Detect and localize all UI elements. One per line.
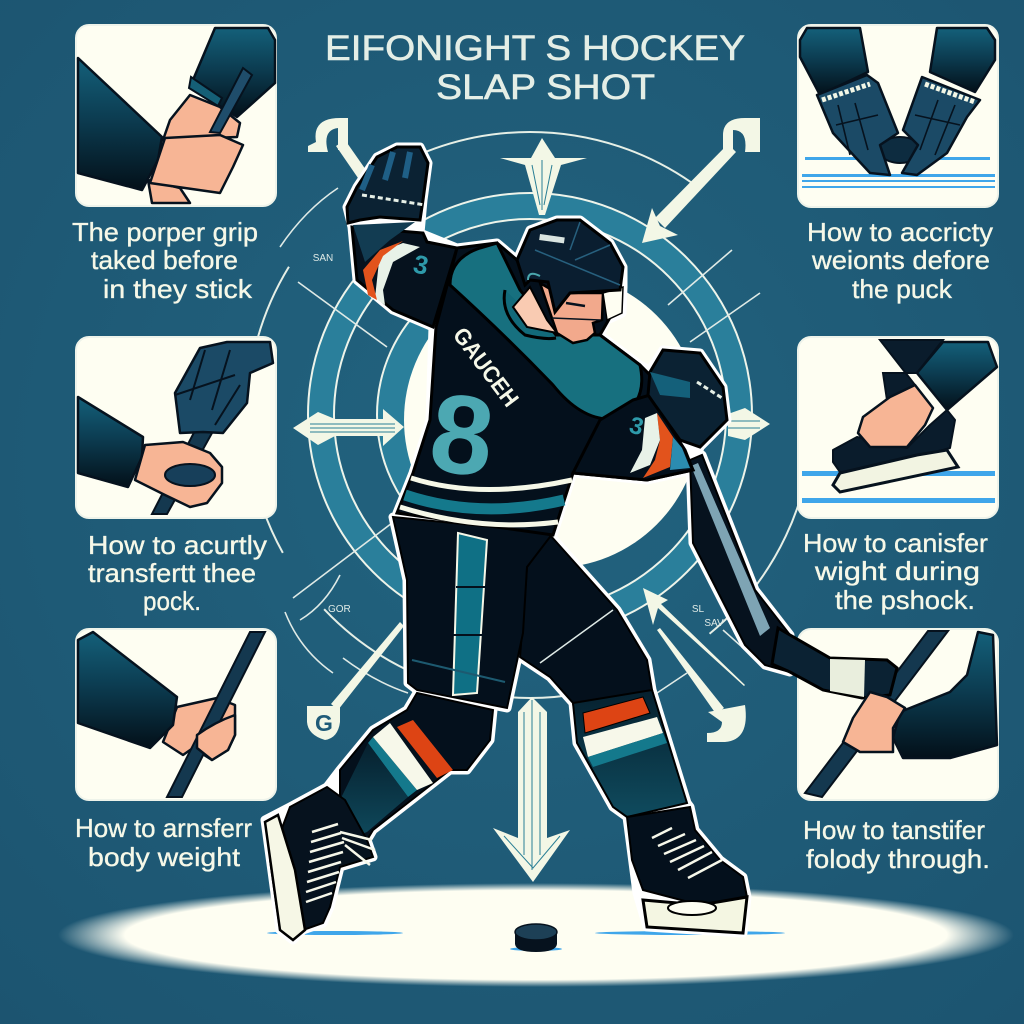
caption: weight <box>807 217 993 304</box>
guide lines and small labels: SAV <box>704 618 724 629</box>
front glove <box>648 350 727 447</box>
arrow: top left <box>308 118 366 178</box>
caption: grip <box>72 217 258 304</box>
jersey number: 8 <box>424 370 500 500</box>
panel: bottom hand <box>76 337 276 518</box>
caption: follow through: How to tanstifer <box>803 815 985 845</box>
raised glove <box>347 147 428 223</box>
caption: grip: taked before <box>91 245 238 275</box>
caption: weight during: How to canisfer <box>803 528 988 558</box>
panel: stick hold <box>76 629 276 800</box>
guide lines and small labels <box>280 188 760 693</box>
caption: body weight: body weight <box>88 842 241 872</box>
arrow: lower right <box>643 588 746 742</box>
caption: grip: in they stick <box>103 274 253 304</box>
arrow: lower left: G <box>315 710 333 736</box>
caption: weight: weionts defore <box>811 245 990 275</box>
caption: transfer: pock. <box>143 586 201 616</box>
caption: weight during <box>803 528 988 615</box>
caption: weight: How to accricty <box>807 217 993 247</box>
raised arm: 3 <box>411 249 431 281</box>
collar <box>504 290 556 339</box>
stick blade <box>772 628 897 698</box>
direction arrows <box>293 118 770 882</box>
front leg and skate <box>520 535 747 933</box>
arrow: left <box>293 409 404 446</box>
panel: follow through <box>772 628 998 800</box>
arrow: top <box>500 138 587 215</box>
guide lines and small labels: .GOR <box>325 604 351 615</box>
hockey stick <box>690 455 790 672</box>
arrow: right <box>728 408 770 440</box>
guide lines and small labels: SL <box>692 604 705 615</box>
title: EIFONIGHT S HOCKEY <box>325 29 745 68</box>
caption: transfer: How to acurtly <box>88 530 267 560</box>
caption: body weight: How to arnsferr <box>75 813 252 843</box>
puck <box>510 924 562 952</box>
helmet <box>517 220 623 312</box>
front arm: 3 <box>626 412 646 441</box>
caption: transfer: transfertt thee <box>88 558 256 588</box>
arrow: lower left <box>307 622 404 740</box>
caption: transfer <box>88 530 267 616</box>
arrow: top right <box>642 118 760 243</box>
concentric target rings <box>247 132 813 698</box>
front arm <box>573 395 693 480</box>
caption: body weight <box>75 813 252 872</box>
jersey <box>397 243 693 535</box>
hockey player <box>265 147 790 940</box>
guide lines and small labels: SAN <box>313 253 333 264</box>
title: SLAP SHOT <box>436 68 655 107</box>
raised arm <box>352 222 457 327</box>
jersey hem stripes <box>400 478 572 525</box>
caption: grip: The porper grip <box>72 217 258 247</box>
caption: follow through: folody through. <box>806 844 990 874</box>
panel: grip <box>76 25 276 206</box>
caption: follow through <box>803 815 990 874</box>
ice surface <box>58 883 1014 987</box>
title <box>325 29 745 107</box>
panel: skate <box>798 337 998 518</box>
rear leg and skate <box>265 693 493 940</box>
neck and face <box>513 283 623 343</box>
caption: weight during: wight during <box>814 556 980 586</box>
player white outline <box>265 147 790 940</box>
panel: gloves on puck <box>798 25 998 207</box>
arrow: bottom <box>493 697 570 882</box>
jersey name: GAUCEH <box>448 322 524 411</box>
caption: weight: the puck <box>852 274 953 304</box>
caption: weight during: the pshock. <box>835 585 975 615</box>
shorts <box>393 517 553 708</box>
